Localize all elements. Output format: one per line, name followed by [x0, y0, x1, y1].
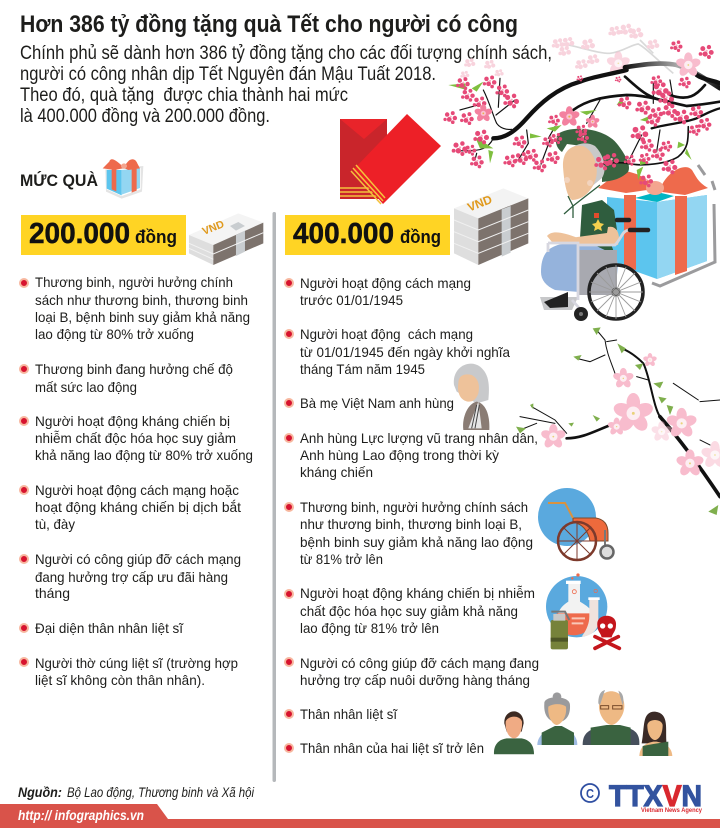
price tag: 400.000 đồng [285, 215, 450, 255]
price tag: 200.000 đồng: đồng [135, 227, 177, 247]
icon: large VND stack: VND [465, 192, 494, 214]
list: 400.000 đồng recipients: Thương binh, người hưởng chính sách [300, 499, 528, 515]
footer band with url: http:// infographics.vn [18, 807, 144, 823]
large blossoms [474, 104, 493, 122]
TTXVN logo: Vietnam News Agency [641, 808, 703, 814]
price tag: 400.000 đồng: đồng [400, 227, 441, 247]
list: 200.000 đồng recipients: liệt sĩ không còn thân nhân). [35, 672, 205, 688]
list: 200.000 đồng recipients: loại B, bệnh binh suy giảm khả năng [35, 309, 250, 325]
intro text [20, 43, 552, 127]
list: 400.000 đồng recipients: hưởng trợ cấp nuôi dưỡng hàng tháng [300, 672, 530, 688]
pink flower clusters [456, 77, 470, 90]
list: 200.000 đồng recipients: Đại diện thân nhân liệt sĩ [35, 620, 184, 636]
list: 400.000 đồng recipients: tháng Tám năm 1945 [300, 361, 425, 377]
black branches [460, 64, 720, 167]
gift box [598, 165, 715, 286]
list: 200.000 đồng recipients: hoạt động kháng chiến bị dịch bắt [35, 499, 241, 515]
list: 200.000 đồng recipients: Người thờ cúng liệt sĩ (trường hợp [35, 655, 238, 671]
price tag: 200.000 đồng: 200.000 [29, 218, 130, 250]
heading: mức quà: MỨC QUÀ [20, 171, 98, 190]
TTXVN logo: C [586, 786, 595, 801]
list: 200.000 đồng recipients: sách như thương binh, thương binh [35, 292, 248, 308]
list: 400.000 đồng recipients: từ 01/01/1945 đến ngày khởi nghĩa [300, 344, 510, 360]
price tag: 200.000 đồng [21, 215, 186, 255]
list: 400.000 đồng recipients: Người hoạt động kháng chiến bị nhiễm [300, 585, 535, 601]
icon: large VND stack [454, 188, 528, 265]
list: 200.000 đồng recipients: tháng [35, 585, 70, 601]
pale fading branches [460, 24, 673, 78]
source line [18, 784, 255, 800]
icon: small gift box [103, 159, 143, 199]
list: 400.000 đồng recipients: kháng chiến [300, 464, 373, 480]
icon: elderly mother [454, 364, 489, 430]
leaves [448, 82, 692, 180]
list: 400.000 đồng recipients: Bà mẹ Việt Nam anh hùng [300, 395, 454, 411]
list: 200.000 đồng recipients: Người hoạt động kháng chiến bị [35, 413, 230, 429]
list: 400.000 đồng recipients: như thương binh, thương binh loại B, [300, 516, 522, 532]
list: 400.000 đồng recipients: Thân nhân liệt sĩ [300, 706, 398, 722]
list: 400.000 đồng recipients: Anh hùng Lao động trong thời kỳ [300, 447, 499, 463]
person [540, 129, 629, 310]
icon: chemical flasks and skull [546, 573, 619, 649]
list: 400.000 đồng recipients: lao động từ 81% trở lên [300, 620, 439, 636]
list: 400.000 đồng recipients: Người có công giúp đỡ cách mạng đang [300, 655, 539, 671]
list: 200.000 đồng recipients: lao động từ 80% trở xuống [35, 326, 194, 342]
list: 200.000 đồng recipients: đang hưởng trợ cấp ưu đãi hàng [35, 569, 228, 585]
price tag: 400.000 đồng: 400.000 [293, 218, 394, 250]
illustration: veteran in wheelchair with gift [540, 129, 715, 321]
title: Hơn 386 tỷ đồng tặng quà Tết cho người có công [20, 11, 518, 38]
source line: Nguồn: [18, 784, 62, 800]
intro text: người có công nhân dịp Tết Nguyên đán Mậu Tuất 2018. [20, 64, 436, 85]
icon: wheelchair in blue circle [538, 488, 614, 560]
cherry blossom branch, top right [443, 24, 720, 187]
list: 400.000 đồng recipients: từ 81% trở lên [300, 551, 383, 567]
list: 400.000 đồng recipients: Người hoạt động cách mạng [300, 326, 473, 342]
wheelchair [548, 220, 648, 321]
list: 400.000 đồng recipients: trước 01/01/1945 [300, 292, 403, 308]
list: 400.000 đồng recipients: Anh hùng Lực lượng vũ trang nhân dân, [300, 430, 538, 446]
list: 200.000 đồng recipients: mất sức lao động [35, 379, 137, 395]
list: 400.000 đồng recipients: Thân nhân của hai liệt sĩ trở lên [300, 740, 484, 756]
source line: Bộ Lao động, Thương binh và Xã hội [67, 784, 255, 800]
list: 400.000 đồng recipients: bệnh binh suy giảm khả năng lao động [300, 534, 533, 550]
footer band with url [0, 804, 720, 828]
icon: small VND stack [189, 213, 263, 265]
divider line [272, 212, 276, 782]
intro text: là 400.000 đồng và 200.000 đồng. [20, 106, 270, 127]
list: 200.000 đồng recipients: Người có công giúp đỡ cách mạng [35, 551, 241, 567]
flowering branch, right middle [516, 327, 720, 515]
list: 200.000 đồng recipients: Thương binh đang hưởng chế độ [35, 361, 233, 377]
red envelopes [340, 114, 441, 204]
list: 200.000 đồng recipients: tù, đày [35, 516, 75, 532]
icon: small VND stack: VND [201, 218, 226, 238]
list: 400.000 đồng recipients: Người hoạt động cách mạng [300, 275, 471, 291]
intro text: Theo đó, quà tặng được chia thành hai mức [20, 85, 348, 106]
list: 200.000 đồng recipients: nhiễm chất độc hóa học suy giảm [35, 430, 236, 446]
icon: family of four [494, 690, 672, 756]
list: 400.000 đồng recipients [285, 275, 539, 756]
list: 200.000 đồng recipients: Thương binh, người hưởng chính [35, 274, 233, 290]
list: 200.000 đồng recipients [20, 274, 253, 688]
list: 200.000 đồng recipients: khả năng lao động từ 80% trở xuống [35, 447, 253, 463]
TTXVN logo: TTXVN [609, 780, 702, 813]
list: 200.000 đồng recipients: Người hoạt động cách mạng hoặc [35, 482, 239, 498]
list: 400.000 đồng recipients: chất độc hóa học suy giảm khả năng [300, 603, 518, 619]
intro text: Chính phủ sẽ dành hơn 386 tỷ đồng tặng cho các đối tượng chính sách, [20, 43, 552, 64]
